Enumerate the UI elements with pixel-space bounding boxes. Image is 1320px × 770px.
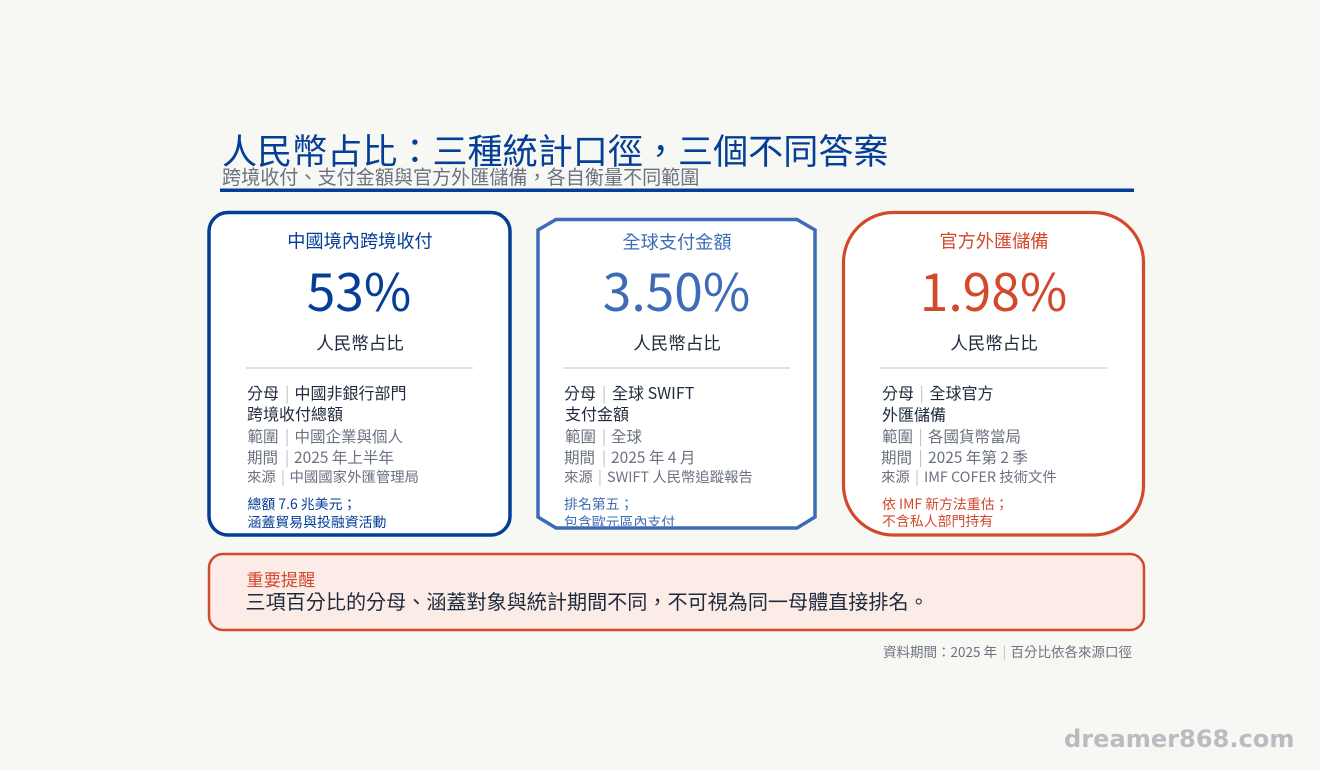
detail list: 期間 — [564, 446, 595, 468]
detail list: | — [918, 425, 923, 447]
detail list: 全球 SWIFT — [612, 380, 695, 404]
detail list: 中國非銀行部門 — [294, 380, 407, 404]
detail list — [564, 380, 753, 487]
panel: cross-border receipts — [209, 212, 510, 535]
detail list: 來源 — [564, 466, 593, 487]
note: 包含歐元區內支付 — [564, 512, 675, 532]
card frame — [844, 212, 1144, 535]
detail list: | — [918, 446, 923, 468]
panel: official reserves — [844, 212, 1144, 535]
detail list: 中國國家外匯管理局 — [290, 466, 419, 487]
detail list: 分母 — [247, 380, 279, 404]
detail list: 中國企業與個人 — [294, 425, 403, 447]
detail list: | — [285, 380, 289, 404]
note — [564, 497, 674, 526]
callout box — [209, 554, 1144, 630]
detail list: 來源 — [247, 466, 276, 487]
detail list: | — [602, 425, 606, 447]
detail list: 範圍 — [882, 425, 913, 447]
detail list: 外匯儲備 — [882, 402, 946, 426]
panel: global payments — [538, 220, 815, 532]
detail list: | — [915, 466, 919, 487]
detail list: 範圍 — [248, 425, 279, 447]
detail list: | — [598, 466, 602, 487]
detail list: 2025 年第 2 季 — [928, 446, 1028, 468]
card frame — [538, 220, 815, 528]
callout heading: 重要提醒 — [246, 566, 315, 591]
detail list: | — [602, 380, 606, 404]
divider — [563, 367, 790, 369]
card heading: 中國境內跨境收付 — [287, 228, 433, 254]
label: 人民幣占比 — [950, 330, 1038, 356]
detail list: 支付金額 — [565, 401, 629, 425]
detail list: | — [285, 425, 289, 447]
detail list: IMF COFER 技術文件 — [924, 466, 1057, 487]
note: 排名第五； — [564, 494, 633, 514]
detail list: 分母 — [564, 380, 596, 404]
detail list: 範圍 — [565, 425, 596, 447]
footnote: 百分比依各來源口徑 — [1010, 641, 1132, 661]
detail list: | — [920, 380, 924, 404]
detail list: | — [285, 446, 289, 468]
detail list: 期間 — [247, 446, 278, 468]
detail list: 2025 年 4 月 — [611, 446, 695, 468]
watermark: dreamer868.com — [1064, 725, 1294, 753]
detail list: 跨境收付總額 — [247, 401, 343, 425]
big number: 53% — [307, 251, 411, 326]
card heading: 全球支付金額 — [622, 228, 732, 254]
detail list: 全球 — [611, 425, 643, 447]
card frame — [209, 212, 510, 535]
divider — [880, 367, 1107, 369]
detail list: 來源 — [881, 466, 910, 487]
subtitle: 跨境收付、支付金額與官方外匯儲備，各自衡量不同範圍 — [222, 162, 699, 190]
big number: 3.50% — [603, 251, 750, 326]
title rule — [220, 188, 1134, 192]
callout: important reminder — [209, 554, 1144, 630]
title: 人民幣占比：三種統計口徑，三個不同答案 — [222, 124, 888, 175]
detail list: 全球官方 — [930, 380, 994, 404]
label: 人民幣占比 — [316, 330, 404, 356]
footnote: | — [1002, 641, 1006, 661]
big number: 1.98% — [920, 251, 1067, 326]
footnote: 資料期間：2025 年 — [883, 641, 997, 661]
card heading: 官方外匯儲備 — [939, 228, 1049, 254]
note: 總額 7.6 兆美元； — [248, 494, 356, 514]
detail list: | — [281, 466, 285, 487]
detail list: 2025 年上半年 — [294, 446, 394, 468]
label: 人民幣占比 — [633, 330, 721, 356]
note: 依 IMF 新方法重估； — [882, 494, 1008, 514]
detail list: 分母 — [882, 380, 914, 404]
detail list — [247, 380, 419, 487]
detail list — [881, 380, 1057, 487]
note: 涵蓋貿易與投融資活動 — [248, 512, 387, 532]
detail list: SWIFT 人民幣追蹤報告 — [607, 466, 753, 487]
callout body: 三項百分比的分母、涵蓋對象與統計期間不同，不可視為同一母體直接排名。 — [246, 586, 929, 615]
detail list: | — [602, 446, 606, 468]
detail list: 期間 — [881, 446, 912, 468]
divider — [246, 367, 473, 369]
card border — [538, 220, 815, 528]
detail list: 各國貨幣當局 — [928, 425, 1021, 447]
note: 不含私人部門持有 — [882, 511, 993, 531]
